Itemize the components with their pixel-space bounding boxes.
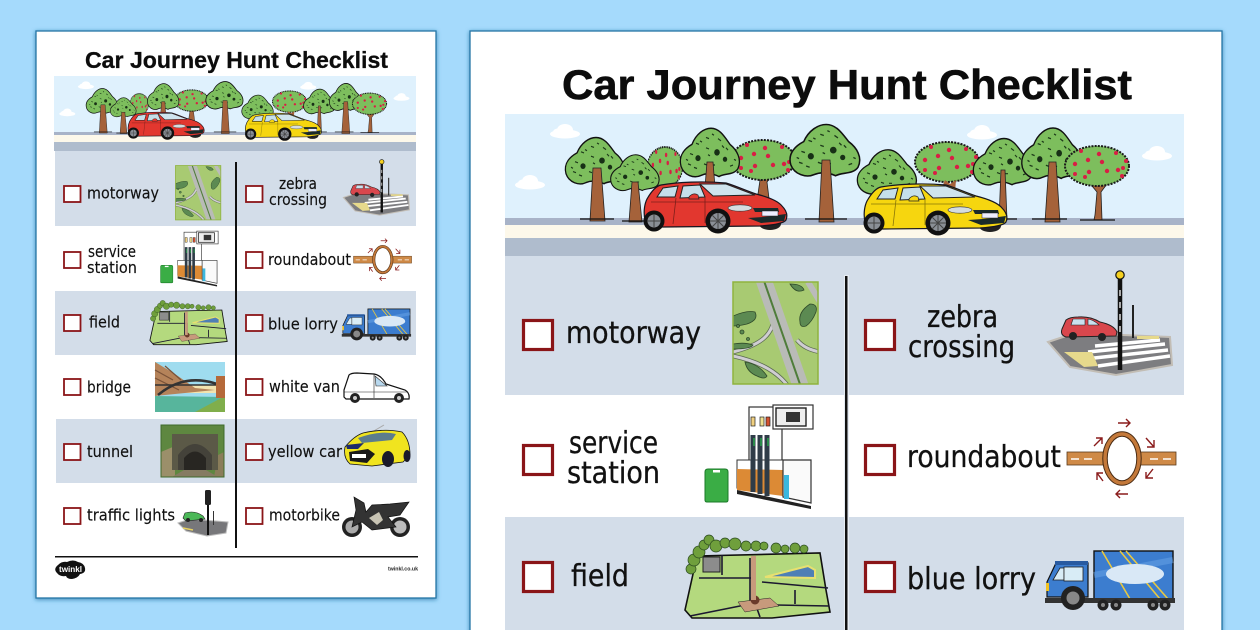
icon: tunnel <box>161 425 224 477</box>
title: Car Journey Hunt Checklist <box>562 61 1132 108</box>
logo: twinkl <box>55 560 85 579</box>
icon: white van <box>344 373 409 403</box>
item: motorbike <box>246 497 410 537</box>
item: roundabout <box>866 419 1176 498</box>
item: yellow car <box>246 425 410 467</box>
item: motorway: motorway <box>87 184 159 202</box>
item: roundabout: roundabout <box>907 440 1061 475</box>
item: white van: white van <box>269 377 340 396</box>
item: blue lorry: blue lorry <box>907 562 1036 597</box>
item: service station: service <box>569 426 658 461</box>
title: Car Journey Hunt Checklist <box>85 47 388 73</box>
banner: road scene with trees and cars <box>54 76 416 151</box>
item: bridge: bridge <box>87 378 131 396</box>
item: blue lorry <box>246 309 411 341</box>
footer url: twinkl.co.uk <box>388 566 418 572</box>
centre divider <box>235 162 237 548</box>
icon: yellow car <box>345 425 410 467</box>
item: blue lorry: blue lorry <box>268 314 338 334</box>
item: zebra crossing: crossing <box>269 190 327 209</box>
checklist row backgrounds <box>55 151 417 483</box>
item: roundabout <box>246 239 412 281</box>
item: tunnel: tunnel <box>87 442 133 461</box>
item: zebra crossing: crossing <box>908 330 1015 365</box>
footer rule <box>55 556 418 558</box>
banner: road scene with trees and cars <box>505 114 1184 256</box>
item: zebra crossing <box>866 271 1172 375</box>
checklist row backgrounds <box>505 256 1184 630</box>
logo: twinkl: twinkl <box>59 565 82 574</box>
item: roundabout: roundabout <box>268 250 351 269</box>
item: traffic lights <box>64 490 228 536</box>
item: field <box>524 535 830 618</box>
item: field: field <box>571 559 629 594</box>
item: motorway <box>64 163 223 224</box>
centre divider <box>844 275 849 630</box>
icon: motorbike <box>342 497 410 537</box>
item: service station: station <box>87 258 137 277</box>
icon: traffic lights <box>178 490 228 536</box>
item: zebra crossing <box>246 160 409 215</box>
item: service station <box>524 405 813 509</box>
item: service station: station <box>567 456 660 491</box>
item: blue lorry <box>866 551 1175 610</box>
item: field <box>64 300 227 345</box>
panel: small worksheet preview <box>36 31 436 598</box>
item: yellow car: yellow car <box>268 442 342 461</box>
item: service station: service <box>88 242 136 261</box>
item: tunnel <box>64 425 224 477</box>
item: service station <box>64 231 218 287</box>
icon: bridge <box>155 362 225 412</box>
item: motorway <box>524 278 822 392</box>
item: motorbike: motorbike <box>269 506 340 524</box>
item: bridge <box>64 362 225 412</box>
item: zebra crossing: zebra <box>279 174 317 193</box>
item: motorway: motorway <box>566 316 701 351</box>
item: field: field <box>89 312 120 332</box>
item: white van <box>246 373 409 403</box>
item: zebra crossing: zebra <box>927 300 998 335</box>
panel: enlarged worksheet detail <box>470 31 1222 630</box>
item: traffic lights: traffic lights <box>87 506 175 524</box>
